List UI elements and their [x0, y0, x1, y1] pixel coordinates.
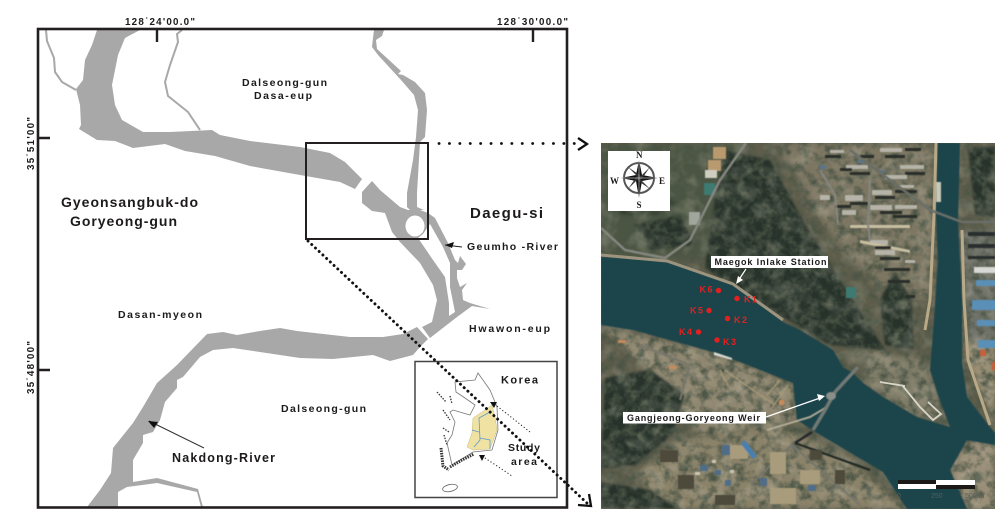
- fields and village: [618, 340, 845, 505]
- Korea label: Korea: [501, 374, 539, 386]
- sampling points K1-K6: K2: [734, 315, 747, 325]
- place labels: [61, 77, 558, 465]
- white wedge between channels: [418, 224, 455, 316]
- scale bar: 500 m: [965, 493, 985, 500]
- arrow: Nakdong River: [148, 421, 204, 448]
- terrain: [601, 143, 995, 509]
- sampling points K1-K6: K4: [679, 327, 692, 337]
- study area basin: [467, 405, 497, 450]
- map frame: [38, 29, 567, 508]
- latitude labels: 35˙48'00": [26, 341, 37, 394]
- place labels: Dalseong-gun: [281, 403, 366, 415]
- compass rose: N: [636, 150, 643, 160]
- sampling points K1-K6: K5: [690, 306, 703, 316]
- sports fields: [689, 147, 941, 298]
- sampling points K1-K6: [679, 284, 757, 347]
- Jeju island: [442, 483, 458, 493]
- sampling points K1-K6: K6: [700, 284, 712, 294]
- tick marks: [39, 30, 533, 370]
- scale bar: [897, 480, 984, 498]
- dotted connector to photo: [308, 138, 591, 506]
- Study area label: [508, 442, 540, 468]
- weir: [795, 367, 858, 443]
- Nakdong river, middle reach: [362, 181, 490, 338]
- west coast islands: [437, 392, 452, 445]
- latitude labels: [26, 117, 37, 394]
- arrow: Geumho River: [445, 242, 462, 248]
- callout: Maegok Inlake Station: [711, 256, 828, 284]
- callout: Gangjeong-Goryeong Weir: Gangjeong-Goryeong Weir: [627, 413, 760, 423]
- longitude labels: [125, 17, 568, 28]
- study-area rectangle: [306, 143, 428, 239]
- place labels: Dasan-myeon: [118, 309, 202, 321]
- longitude labels: 128˙30'00.0": [497, 17, 568, 28]
- place labels: Nakdong-River: [172, 451, 275, 465]
- roads: [601, 143, 995, 505]
- land texture: [601, 143, 995, 509]
- callout: Gangjeong-Goryeong Weir: [623, 394, 825, 424]
- place labels: Dasa-eup: [254, 90, 312, 102]
- compass rose: [608, 150, 670, 211]
- latitude labels: 35˙51'00": [26, 117, 37, 170]
- western tributaries: [46, 30, 200, 130]
- Korea outline: [447, 373, 498, 465]
- compass rose: E: [659, 176, 665, 186]
- compass rose: S: [636, 200, 642, 210]
- Study area label: Study: [508, 442, 540, 454]
- place labels: Gyeonsangbuk-do: [61, 194, 198, 210]
- Nakdong river, upper reach: [76, 30, 362, 189]
- sampling points K1-K6: K1: [744, 294, 757, 304]
- apartments: [820, 148, 925, 298]
- place labels: Goryeong-gun: [70, 213, 177, 229]
- peninsula road loop: [880, 382, 941, 420]
- callout: Maegok Inlake Station: Maegok Inlake Station: [714, 257, 826, 267]
- inset: Korea: [415, 362, 557, 498]
- compass rose: W: [610, 176, 619, 186]
- island: [406, 216, 424, 236]
- embankment: [925, 143, 990, 425]
- place labels: Dalseong-gun: [242, 77, 327, 89]
- sandy levee: [601, 255, 783, 320]
- place labels: Daegu-si: [470, 205, 543, 222]
- sampling points K1-K6: K3: [723, 337, 736, 347]
- rivers: [601, 143, 995, 509]
- industrial blocks: [968, 232, 996, 370]
- panel: location map: [26, 17, 591, 508]
- longitude labels: 128˙24'00.0": [125, 17, 195, 28]
- south-west archipelago: [441, 448, 474, 470]
- Study area label: area: [511, 456, 537, 468]
- scale bar: 250: [931, 493, 943, 500]
- place labels: Hwawon-eup: [469, 323, 550, 335]
- basin streams: [472, 412, 490, 449]
- place labels: Geumho -River: [467, 241, 558, 253]
- Nakdong river, lower reach: [87, 327, 428, 507]
- panel: satellite photo: [601, 143, 996, 509]
- Geumho river: [372, 30, 427, 210]
- scale bar: 0: [897, 493, 901, 500]
- study area leaders: [482, 406, 530, 476]
- forest patches: [601, 146, 995, 509]
